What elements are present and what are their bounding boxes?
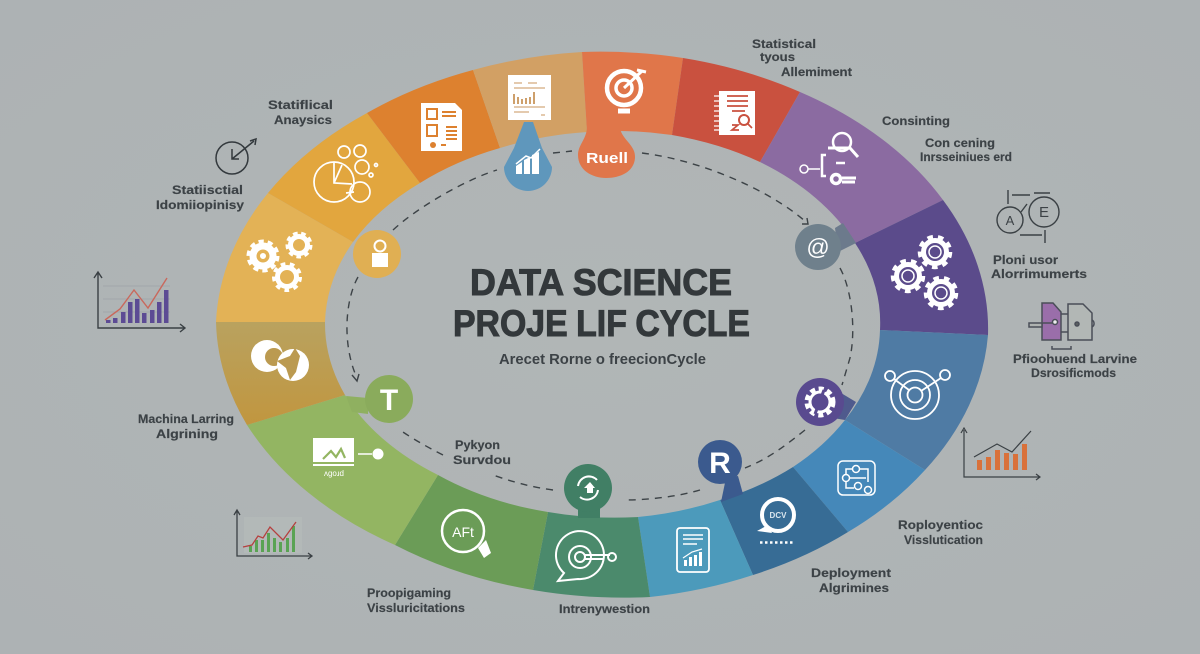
icon: A and E circles: E [1039,204,1049,221]
label: python survey: Pykyon [455,438,500,452]
icon: A and E circles [997,190,1059,243]
label: interpretation: Intrenywestion [559,602,650,616]
label: statistical alignment top: tyous [760,50,795,64]
label: statistical alignment top: Allemiment [781,65,852,79]
icon: clock with arrow [216,139,256,174]
chart: green bars [234,510,312,559]
title: DATA SCIENCE [470,262,732,303]
chart: orange bars [961,428,1040,480]
segment: dark purple gears [855,200,988,335]
segment: navy chat [720,467,848,575]
label: statistical idiomology [156,183,244,212]
node: at sign: @ [806,234,830,260]
icon: magnifier AFt [442,510,491,558]
node: blue chart pin [504,122,552,191]
icon: network target [885,370,950,419]
label: machine learning [138,412,234,441]
icon: three gears yellow [249,234,310,290]
label: profound learning [1013,352,1137,380]
node: R pin: R [709,447,731,480]
label: programming visualizations [367,586,465,615]
label: consinting: Consinting [882,114,950,128]
label: con cening: Inrsseiniues erd [920,150,1012,164]
icon: chat bubble DCV: DCV [770,511,787,520]
icon: connector plug [1029,303,1094,349]
chart: purple bars [94,272,185,332]
label: deployment visualization [898,518,983,547]
segment: coral target [582,52,683,135]
segment: tan report [473,52,587,148]
label: machine learning: Machina Larring [138,412,234,426]
label: profound learning: Pfioohuend Larvine [1013,352,1137,366]
label: con cening [920,136,1012,164]
node: coral Ruell pill: Ruell [586,150,628,167]
label: programming visualizations: Vissluricitations [367,601,465,615]
icon: form document [421,103,462,151]
label: machine learning: Algrining [156,427,218,441]
label: deployment algorithms: Deployment [811,566,891,580]
node: purple gear [796,378,856,426]
label: plan algorithms [991,253,1087,281]
segment: pie amber [268,113,420,242]
label: plan algorithms: Alorrimumerts [991,267,1087,281]
icon: chart screen with node: ʌɡoɹd [324,469,344,478]
label: statistical analysis: Anaysics [274,113,332,127]
icon: chat bubble DCV [757,499,794,542]
label: plan algorithms: Ploni usor [993,253,1058,267]
segment: teal document [638,500,753,597]
icon: notebook [714,91,755,135]
segment: orange form [367,70,500,183]
icon: flow diagram [838,461,875,495]
node: R pin [698,440,743,502]
label: python survey: Survdou [453,453,511,467]
label: deployment algorithms: Algrimines [819,581,889,595]
icon: target bulb [607,70,646,111]
node: coral Ruell pill [578,128,635,178]
node: T circle: T [380,384,398,417]
node: green cycle pin [564,464,612,518]
icon: olive moons [251,340,309,381]
label: statistical alignment top: Statistical [752,37,816,51]
segment: red notebook [672,58,800,162]
icon: magnifier AFt: AFt [452,524,474,540]
icon: three gears purple [893,237,956,308]
segment: light green chart [247,395,438,545]
segment: gears yellow [216,193,353,322]
label: statistical alignment top [752,37,852,79]
node: T circle [346,375,413,423]
label: deployment algorithms [811,566,891,595]
segment: steel blue target [845,330,988,470]
icon: purple key tools [800,133,858,184]
label: deployment visualization: Visslutication [904,533,983,547]
segment: purple tools [760,92,943,243]
segment: mid green magnifier [395,475,548,590]
dashed cycle path [347,151,853,500]
segment: dark green spiral [533,512,650,598]
icon: teal document chart [677,528,709,572]
label: python survey [453,438,511,467]
label: statistical idiomology: Statiisctial [172,183,243,197]
label: deployment visualization: Roployentioc [898,518,983,532]
subtitle: Arecet Rorne o freecionCycle [499,351,706,368]
panel: cycle ring [216,52,988,598]
title [453,262,750,344]
segment: mid blue flow [793,420,925,532]
label: statistical idiomology: Idomiiopinisy [156,198,244,212]
label: programming visualizations: Proopigaming [367,586,451,600]
icon: chart screen with node [313,438,384,478]
label: profound learning: Dsrosificmods [1031,366,1116,380]
icon: report with bars [508,75,551,120]
label: con cening: Con cening [925,136,995,150]
label: statistical analysis: Statiflical [268,98,333,112]
icon: spiral key [556,531,616,581]
icon: pie charts [314,145,378,202]
title: PROJE LIF CYCLE [453,303,750,344]
node: at sign [795,223,856,270]
node: gold lock [353,230,401,278]
label: statistical analysis [268,98,333,127]
segment: olive moons [216,322,345,425]
icon: A and E circles: A [1006,213,1015,228]
arrowheads on dashed path [352,218,808,381]
